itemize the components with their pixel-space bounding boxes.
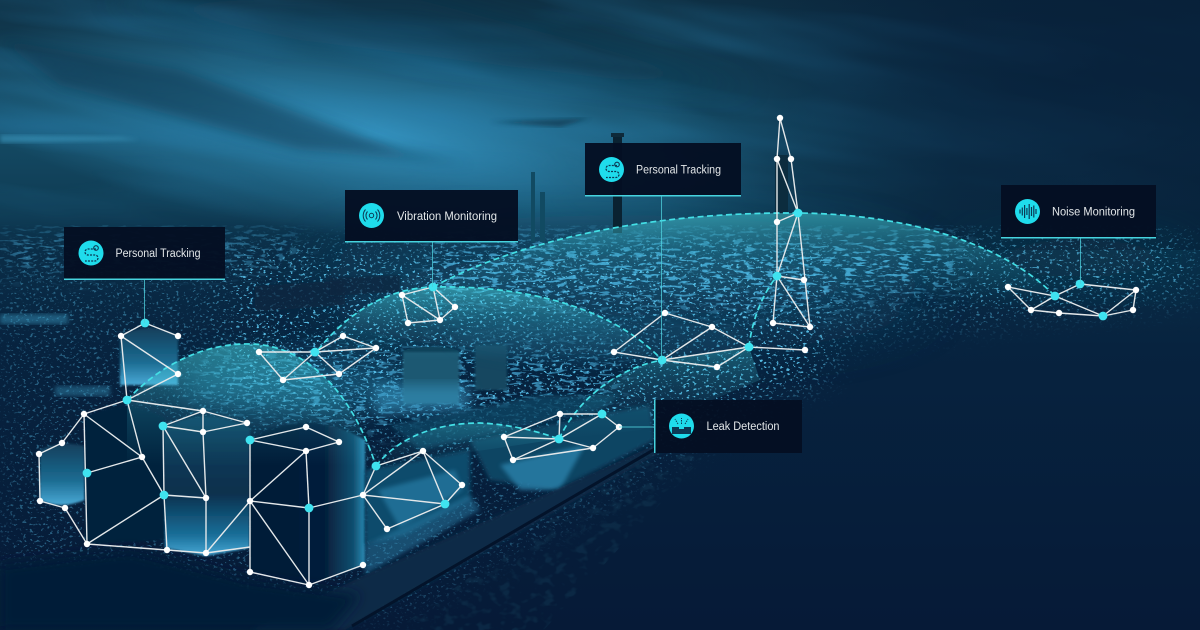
- mesh network: flare tower cluster: [770, 115, 813, 330]
- label: Vibration Monitoring: [397, 211, 497, 223]
- icon: route path: [78, 240, 104, 266]
- mesh network: vibration cluster: [399, 283, 458, 326]
- icon: route path: [599, 157, 624, 182]
- callout: Personal Tracking (left): [64, 227, 225, 323]
- icon: vibration waves: [359, 203, 384, 228]
- label: Leak Detection: [706, 421, 780, 433]
- icon: sound wave: [1015, 199, 1040, 224]
- mesh network: main tank farm cluster: [36, 319, 465, 588]
- icon: leak: [669, 414, 694, 438]
- callout: Personal Tracking (centre): [585, 143, 741, 360]
- dome arcs: coverage between mesh clusters: [127, 213, 1055, 466]
- label: Noise Monitoring: [1052, 206, 1135, 218]
- background: refinery ground and lights: [0, 225, 1200, 630]
- mesh network: leak detection cluster: [501, 410, 622, 463]
- label: Personal Tracking: [116, 248, 200, 260]
- background: dusk sky with clouds: [0, 0, 1200, 376]
- background: storage tanks and buildings: [0, 316, 750, 630]
- callout: Vibration Monitoring: [345, 190, 518, 287]
- mesh network: central cluster: [611, 310, 808, 370]
- callout: Noise Monitoring: [1001, 185, 1156, 284]
- mesh network: noise cluster: [1005, 280, 1139, 320]
- background: distant chimneys: [531, 133, 788, 242]
- mesh network: pipe rack cluster: [256, 333, 379, 383]
- callout: Leak Detection: [619, 400, 802, 453]
- label: Personal Tracking: [636, 164, 721, 176]
